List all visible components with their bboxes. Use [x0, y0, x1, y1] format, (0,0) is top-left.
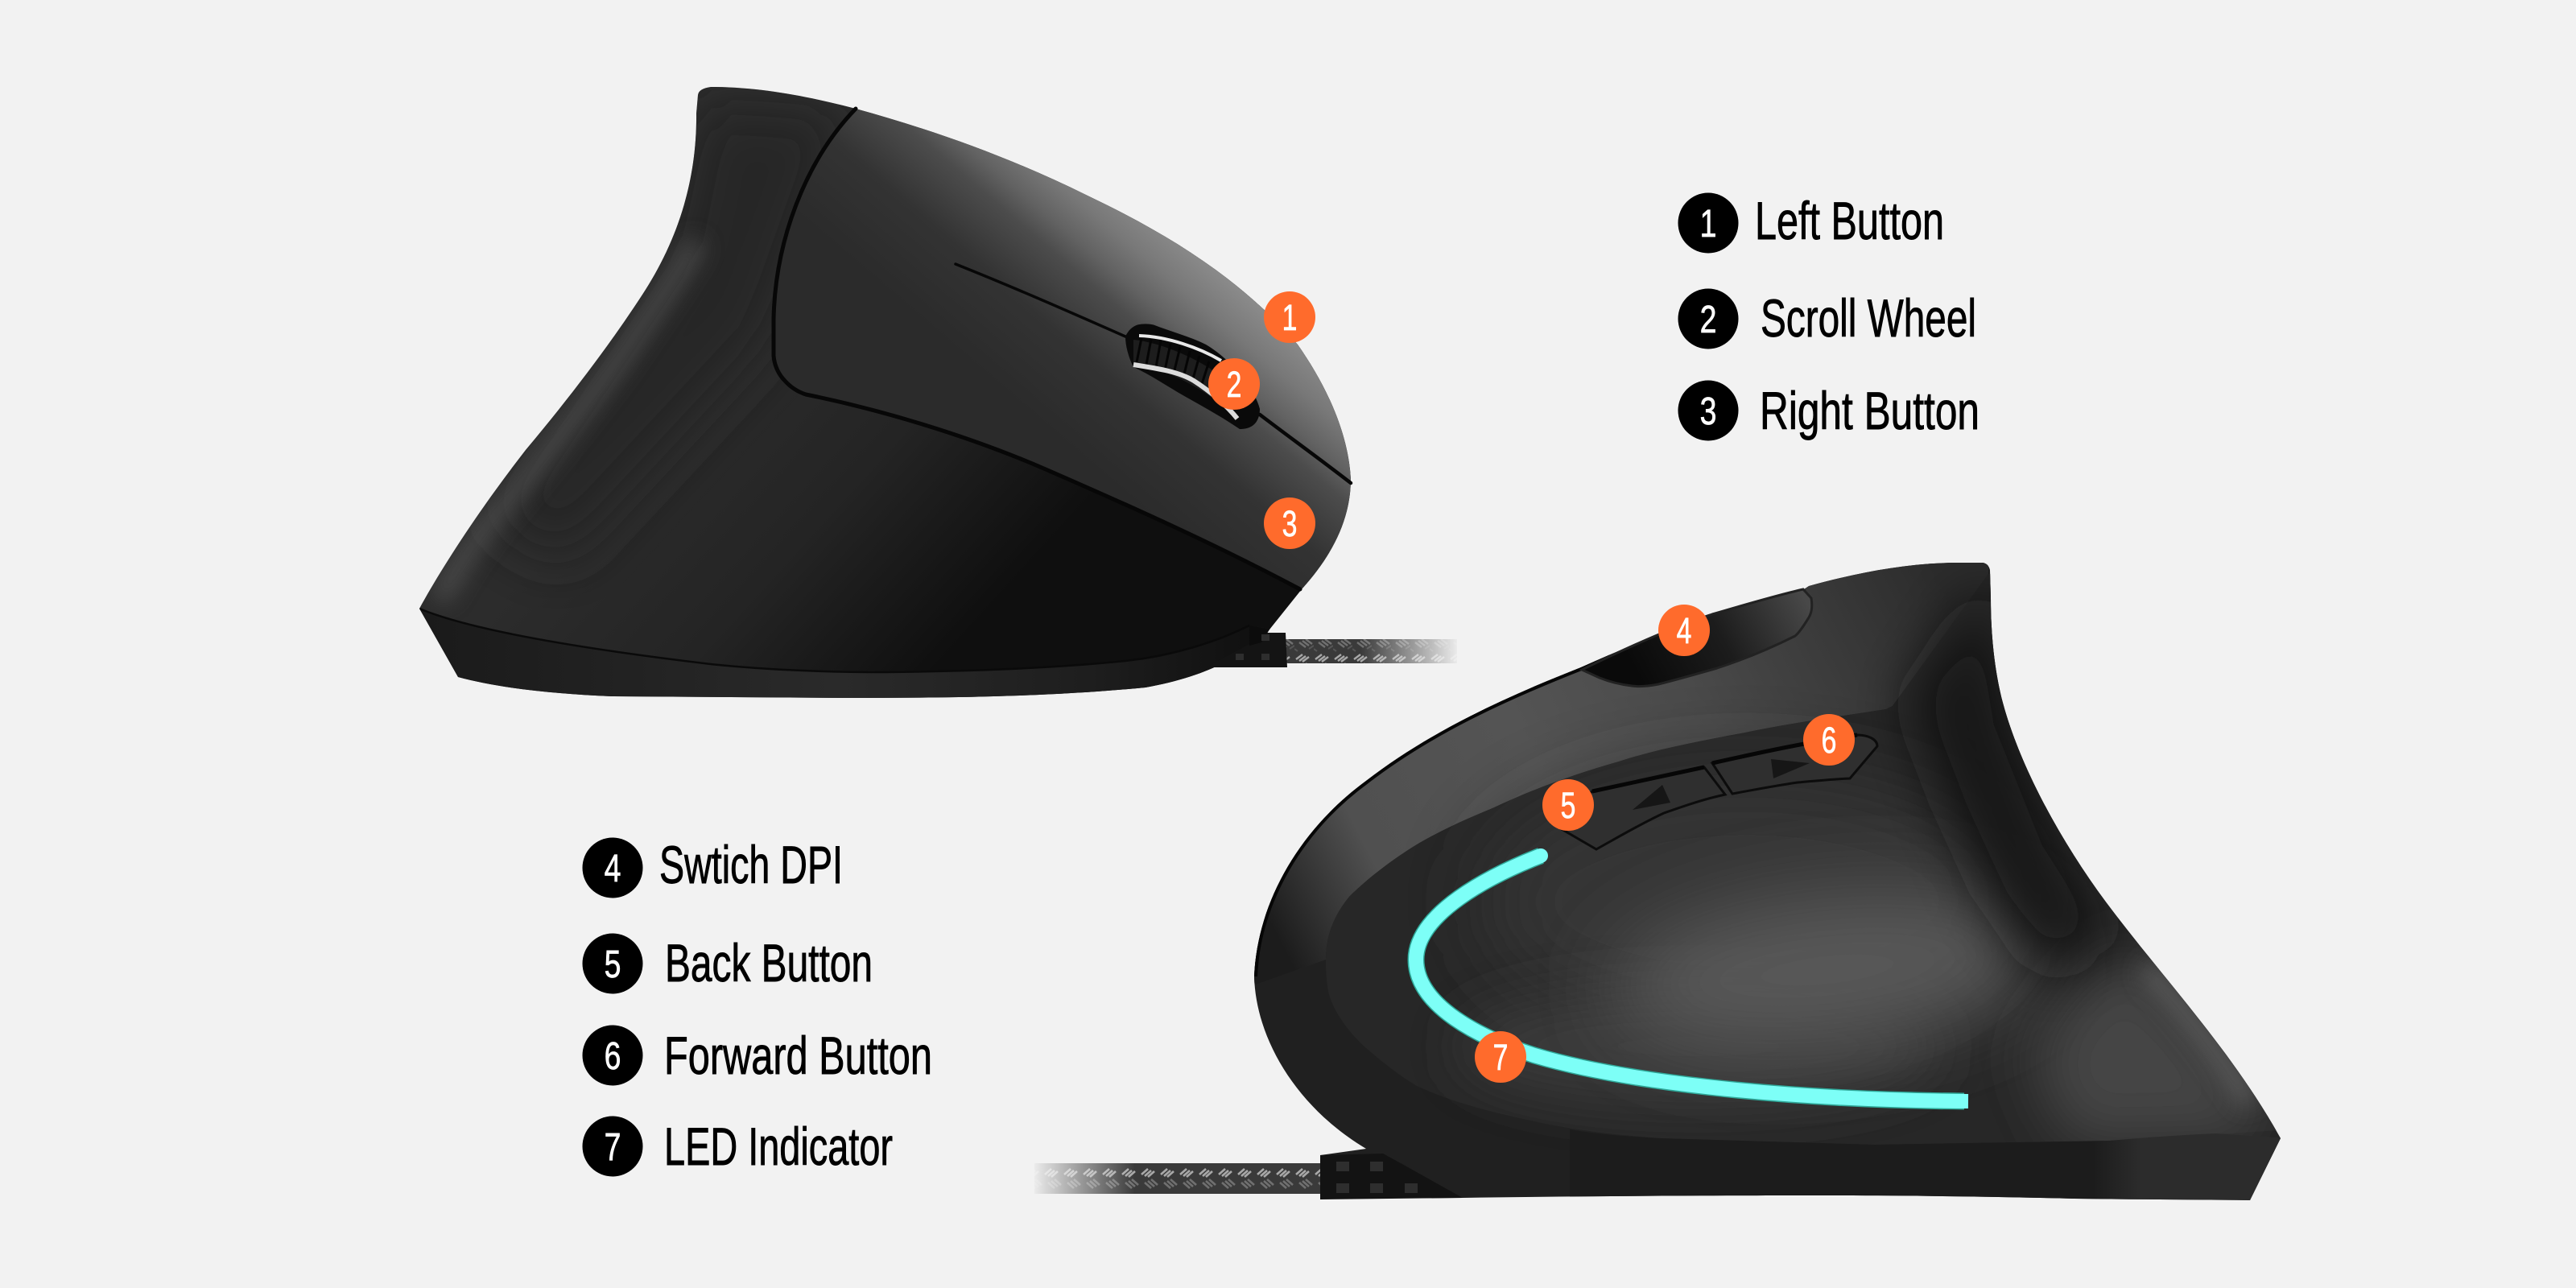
base skirt [1570, 1133, 2281, 1200]
badge 7: 7 [1493, 1038, 1508, 1078]
badge 6 [1803, 714, 1855, 766]
mouse: side view [1254, 563, 2281, 1200]
legend item 2: Scroll Wheel: Scroll Wheel [1761, 288, 1976, 348]
legend item 5: Back Button: 5 [605, 943, 621, 986]
badge 7 [1475, 1031, 1526, 1083]
legend item 4: Swtich DPI: 4 [605, 848, 621, 890]
legend item 3: Right Button: Right Button [1760, 381, 1979, 440]
legend item 6: Forward Button [583, 1026, 932, 1085]
legend item 3: Right Button: 3 [1700, 390, 1716, 433]
legend item 1: Left Button [1678, 191, 1944, 253]
badge 1: 1 [1282, 298, 1297, 338]
side buttons [1552, 735, 1877, 849]
cable: top mouse [1280, 636, 1461, 668]
badge 1 [1264, 291, 1315, 343]
badge 3 [1264, 497, 1315, 549]
badge 2 [1208, 358, 1260, 410]
legend item 4: Swtich DPI [583, 835, 843, 898]
back button [1552, 767, 1725, 849]
legend item 2: Scroll Wheel: 2 [1700, 299, 1716, 341]
panel: grey upper band [1240, 547, 1988, 990]
legend item 5: Back Button [583, 933, 873, 993]
legend item 6: Forward Button: 6 [605, 1035, 621, 1078]
legend item 7: LED Indicator: 7 [605, 1126, 621, 1169]
legend item 1: Left Button: 1 [1700, 203, 1716, 246]
seam lines [774, 109, 1351, 589]
outer rim [1254, 651, 1618, 976]
badge 6: 6 [1822, 720, 1836, 761]
badge 4: 4 [1677, 611, 1691, 651]
cable connector: top mouse [1206, 625, 1287, 667]
legend item 6: Forward Button: Forward Button [664, 1026, 932, 1085]
badge 4 [1658, 605, 1710, 656]
legend item 7: LED Indicator: LED Indicator [664, 1117, 893, 1176]
base skirt [419, 609, 1270, 698]
LED indicator [1416, 848, 1968, 1101]
panel: inner main surface [1373, 573, 2277, 1130]
legend item 4: Swtich DPI: Swtich DPI [659, 835, 843, 894]
forward button [1712, 735, 1877, 794]
badge 5: 5 [1561, 786, 1575, 826]
legend item 7: LED Indicator [583, 1116, 893, 1177]
cable: bottom mouse [1030, 1159, 1328, 1198]
legend item 3: Right Button [1678, 380, 1979, 441]
legend item 1: Left Button: Left Button [1755, 191, 1944, 250]
badge 3: 3 [1282, 504, 1297, 544]
scroll wheel [1125, 324, 1260, 429]
badge 2: 2 [1227, 365, 1241, 405]
badge 5 [1542, 779, 1594, 831]
mouse: front view [402, 72, 1368, 716]
legend item 5: Back Button: Back Button [665, 933, 873, 993]
DPI switch [1582, 589, 1812, 687]
cable connector: bottom mouse [1320, 1154, 1463, 1199]
panel: top shell with buttons [774, 109, 1351, 589]
legend item 2: Scroll Wheel [1678, 288, 1976, 349]
